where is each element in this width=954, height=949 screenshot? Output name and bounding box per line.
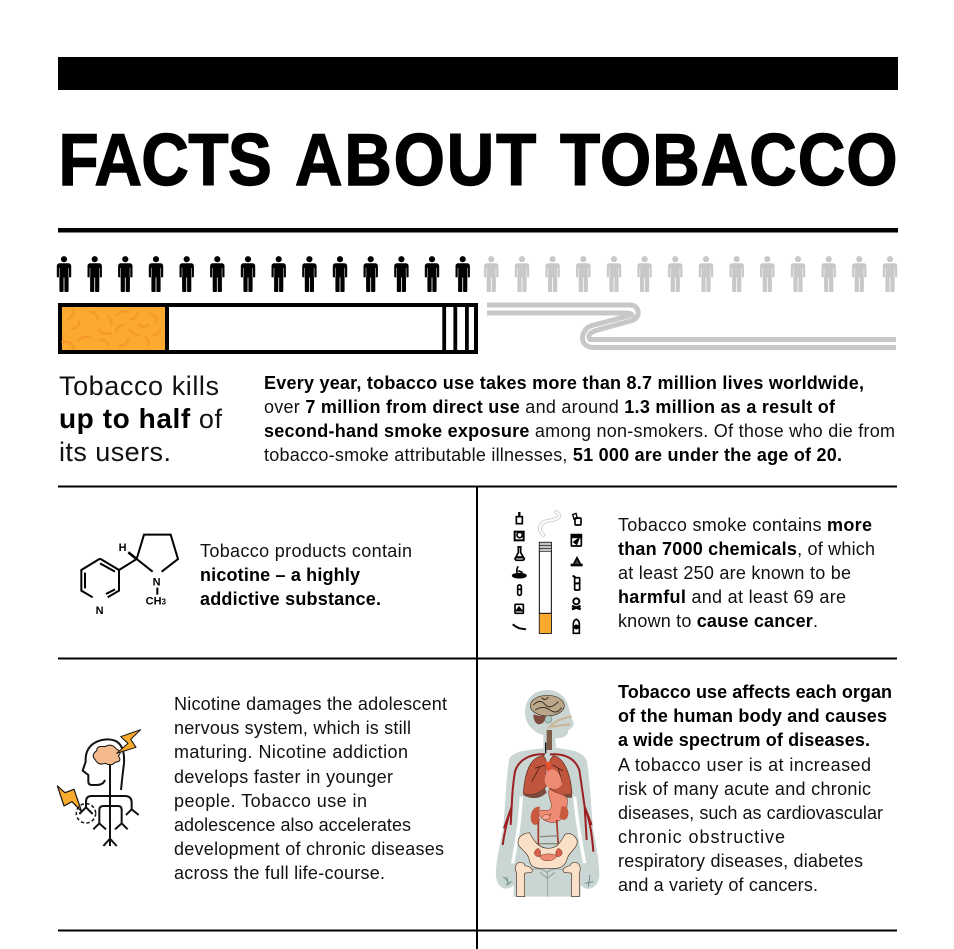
headline: tobacco kills up to half: its users. [59, 437, 171, 467]
icons: left chemical products [513, 512, 526, 629]
icon: nicotine molecule: N [96, 605, 104, 617]
title: ABOUT [295, 119, 536, 201]
text: organs and diseases [618, 682, 892, 895]
pictogram: other users (grey) [484, 256, 897, 292]
text: organs and diseases: Tobacco use affects each organ [618, 682, 892, 702]
hands [503, 875, 593, 887]
title: TOBACCO [560, 119, 897, 201]
text: adolescent nervous system: nervous system, which is still [174, 718, 411, 738]
text: adolescent nervous system: people. Tobacco use in [174, 791, 367, 811]
text: chemicals: Tobacco smoke contains more [618, 515, 872, 535]
text: adolescent nervous system [174, 694, 447, 883]
icons: right chemical products [571, 513, 583, 633]
icon: cigarette bar [60, 305, 476, 352]
text: adolescent nervous system: Nicotine damages the adolescent [174, 694, 447, 714]
icon: nicotine molecule: N [153, 577, 161, 589]
text block: annual deaths [264, 373, 895, 465]
text: adolescent nervous system: adolescence also accelerates [174, 815, 411, 835]
pictogram: people killed by tobacco (black) [57, 256, 470, 292]
text: nicotine [200, 541, 412, 609]
headline: tobacco kills up to half [59, 371, 222, 467]
grid lines [58, 486, 897, 949]
headline: tobacco kills up to half: Tobacco kills [59, 371, 219, 401]
icon: nicotine molecule: CH3 [146, 596, 167, 608]
text: chemicals: than 7000 chemicals, of which [618, 539, 875, 559]
text: adolescent nervous system: across the full life-course. [174, 863, 385, 883]
icon: smoke curl [540, 512, 559, 535]
panel: nicotine [81, 535, 412, 617]
icon: cigarette with chemical products [513, 512, 583, 633]
arteries [503, 754, 545, 845]
femurs [515, 862, 532, 897]
text block: annual deaths: second-hand smoke exposure among non-smokers. Of those who die from [264, 421, 895, 441]
text: organs and diseases: A tobacco user is at increased [618, 755, 871, 775]
text: organs and diseases: chronic obstructive [618, 827, 785, 847]
body silhouette [496, 690, 599, 897]
panel: organs and diseases [496, 682, 892, 897]
text: chemicals: known to cause cancer. [618, 611, 818, 631]
panel: adolescent nervous system [57, 694, 447, 883]
text: organs and diseases: and a variety of cancers. [618, 875, 818, 895]
text: nicotine: Tobacco products contain [200, 541, 412, 561]
text: chemicals [618, 515, 875, 631]
title [59, 119, 897, 201]
text: organs and diseases: of the human body and causes [618, 706, 887, 726]
icon: head with brain and lightning [57, 730, 141, 846]
headline: tobacco kills up to half: up to half of [59, 403, 222, 434]
icon: human body anatomy [496, 690, 599, 897]
title: FACTS [59, 119, 272, 201]
pelvis [518, 833, 577, 868]
top black bar [58, 57, 898, 90]
text: chemicals: harmful and at least 69 are [618, 587, 846, 607]
text: adolescent nervous system: development of chronic diseases [174, 839, 444, 859]
text: nicotine: addictive substance. [200, 589, 381, 609]
title rule [58, 228, 898, 232]
text: organs and diseases: risk of many acute and chronic [618, 779, 871, 799]
text block: annual deaths: Every year, tobacco use takes more than 8.7 million lives worldwide, [264, 373, 864, 393]
text: chemicals: at least 250 are known to be [618, 563, 851, 583]
icon: vertical cigarette [539, 542, 551, 633]
text block: annual deaths: tobacco-smoke attributable illnesses, 51 000 are under the age of 20. [264, 445, 842, 465]
digestive organs [538, 788, 567, 822]
icon: nicotine molecule [81, 535, 178, 617]
brain [530, 695, 564, 716]
lungs [523, 756, 546, 795]
text: nicotine: nicotine – a highly [200, 565, 360, 585]
text block: annual deaths: over 7 million from direct use and around 1.3 million as a result of [264, 397, 836, 417]
icon: cigarette smoke ribbon [487, 305, 896, 348]
text: adolescent nervous system: maturing. Nicotine addiction [174, 742, 408, 762]
airway [548, 717, 572, 728]
text: organs and diseases: diseases, such as cardiovascular [618, 803, 883, 823]
icon: nicotine molecule: H [119, 542, 127, 554]
text: organs and diseases: respiratory diseases, diabetes [618, 851, 863, 871]
text: organs and diseases: a wide spectrum of diseases. [618, 730, 870, 750]
text: adolescent nervous system: develops faster in younger [174, 767, 393, 787]
heart and liver [545, 762, 551, 772]
panel: chemicals [513, 512, 875, 633]
